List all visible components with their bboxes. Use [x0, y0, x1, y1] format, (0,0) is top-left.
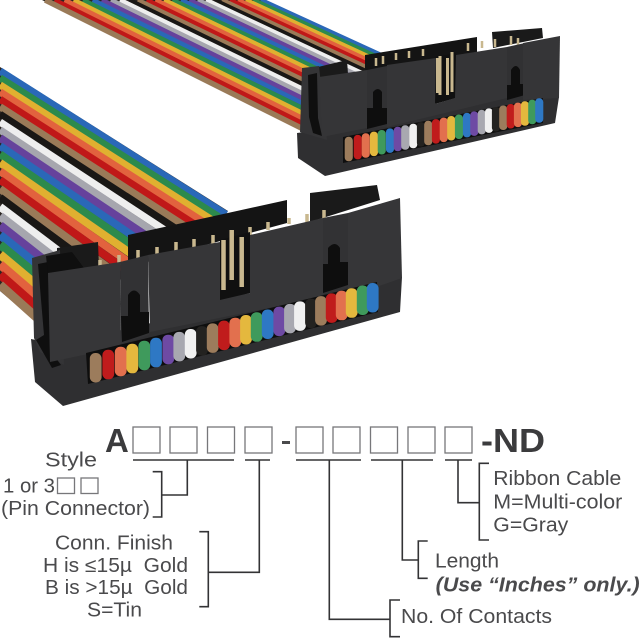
lower ribbon cable — [0, 67, 228, 328]
part number prefix A: A — [105, 422, 129, 459]
label: length: (Use “Inches” only.) — [436, 575, 640, 597]
label: length — [435, 551, 640, 597]
lower connector: left keyed section — [120, 255, 149, 345]
underlines and bracket connectors — [133, 460, 489, 637]
upper connector: wire window — [343, 98, 543, 163]
upper connector: left front block — [319, 70, 367, 137]
lower connector: left side slot — [36, 262, 61, 368]
label: number of contacts: No. Of Contacts — [401, 606, 552, 628]
label: ribbon cable — [493, 468, 623, 537]
upper connector: left keyed section — [367, 66, 387, 128]
label: pin connector — [1, 476, 150, 520]
upper connector: left side slot — [308, 73, 322, 136]
lower connector: right keyed section — [323, 213, 348, 297]
label: length: Length — [435, 551, 499, 573]
upper connector: right block — [523, 36, 560, 100]
lower connector: top pins — [100, 210, 335, 270]
upper connector: top pins — [376, 36, 518, 66]
lower connector — [31, 185, 402, 406]
upper connector: center block — [387, 47, 507, 127]
lower connector: center block — [148, 218, 323, 332]
lower connector: base — [31, 270, 402, 406]
upper connector: center notch — [435, 53, 456, 104]
lower connector: wire window — [86, 282, 378, 384]
lower connector: left slot — [121, 290, 149, 342]
lower connector: back rim — [128, 200, 287, 266]
label: connector finish — [43, 532, 188, 622]
lower connector: left latch shadow — [46, 252, 84, 274]
part number boxes — [133, 427, 472, 453]
upper connector: right slot — [507, 66, 525, 100]
label: pin connector: (Pin Connector) — [1, 498, 150, 520]
upper connector: back rim — [365, 37, 477, 72]
lower connector: back left latch — [57, 242, 99, 278]
lower connector: right slot — [323, 244, 348, 293]
label: connector finish: H is ≤15µ Gold — [43, 555, 188, 577]
label: connector finish: B is >15µ Gold — [45, 577, 188, 599]
upper ribbon cable — [42, 0, 388, 136]
upper connector: back left latch — [318, 60, 348, 78]
label: ribbon cable: Ribbon Cable — [493, 468, 621, 490]
label: ribbon cable: M=Multi-color — [493, 491, 623, 513]
lower connector: right block — [348, 198, 402, 297]
lower connector: back right latch — [310, 185, 380, 222]
upper connector: left side wall — [300, 66, 327, 140]
lower connector: center notch — [220, 232, 250, 302]
label: ribbon cable: G=Gray — [493, 515, 568, 537]
part number code — [105, 422, 545, 459]
lower connector: center pins — [224, 230, 242, 290]
part number suffix -ND: -ND — [481, 422, 545, 459]
upper connector — [297, 28, 560, 176]
upper connector: colored wire ends — [345, 98, 543, 161]
label: pin connector: 1 or 3 — [3, 476, 55, 498]
upper connector: back right latch — [492, 28, 543, 48]
lower connector: left side wall — [32, 250, 64, 365]
lower connector: left front block — [48, 262, 121, 362]
label: connector finish: Conn. Finish — [55, 532, 173, 554]
label: style: Style — [45, 450, 97, 472]
lower connector: colored wire ends — [90, 283, 379, 382]
upper connector: center pins — [438, 52, 452, 95]
upper connector: left slot — [367, 89, 387, 129]
label: connector finish: S=Tin — [87, 600, 142, 622]
upper connector: base — [297, 90, 559, 176]
upper connector: right keyed section — [507, 43, 525, 100]
part number hyphen — [282, 441, 290, 444]
